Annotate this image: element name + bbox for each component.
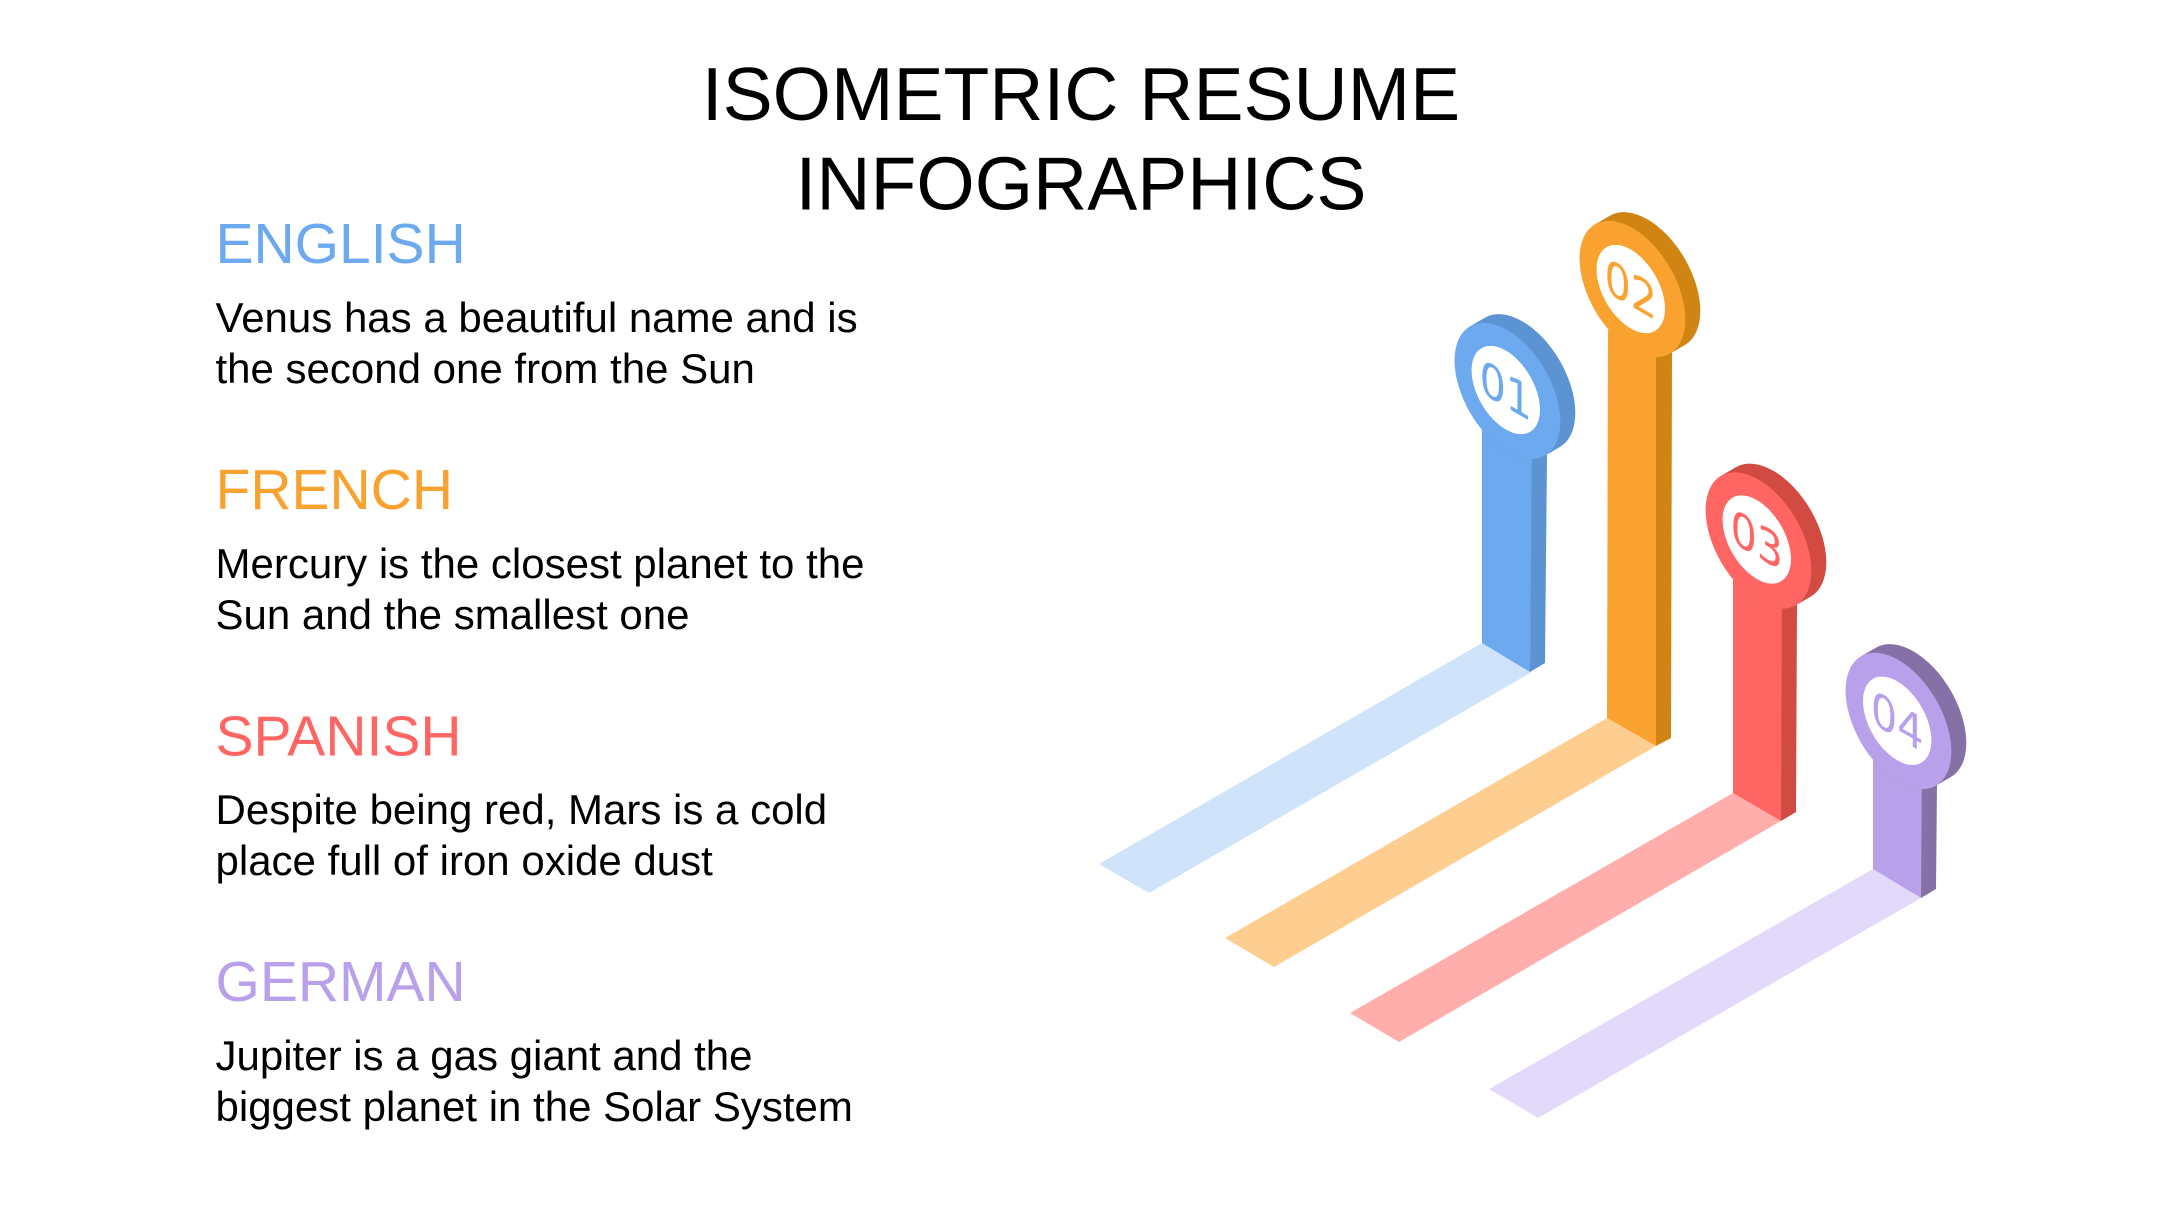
text block: spanish description: place full of iron oxide dust	[216, 837, 713, 884]
text block: english description	[216, 294, 858, 392]
text block: english description: Venus has a beautiful name and is	[216, 294, 858, 341]
title: ISOMETRIC RESUME	[702, 52, 1460, 136]
pin head 04	[1846, 630, 1951, 812]
heading: spanish: SPANISH	[216, 704, 462, 768]
pole 01	[1482, 430, 1547, 672]
text block: german description	[216, 1032, 853, 1130]
panel: french	[216, 458, 864, 638]
pin head 01: 01	[1480, 349, 1532, 434]
panel: english	[216, 212, 858, 392]
pole 04	[1873, 760, 1937, 898]
title	[702, 52, 1460, 226]
shadow 01	[1099, 643, 1532, 893]
heading: french: FRENCH	[216, 458, 453, 522]
pole 02	[1607, 330, 1672, 746]
pin head 01	[1455, 300, 1560, 482]
isometric pin 02	[1225, 198, 1685, 967]
panel: german	[216, 950, 853, 1130]
shadow 04	[1489, 869, 1921, 1118]
text block: spanish description: Despite being red, Mars is a cold	[216, 786, 827, 833]
pin head 04: 04	[1871, 680, 1923, 765]
text block: french description	[216, 540, 864, 638]
text block: english description: the second one from the Sun	[216, 345, 755, 392]
pin head 02: 02	[1605, 248, 1657, 333]
heading: english: ENGLISH	[216, 212, 466, 276]
text block: german description: biggest planet in the Solar System	[216, 1083, 853, 1130]
isometric pin 03	[1350, 449, 1811, 1042]
pin head 03	[1706, 449, 1811, 632]
shadow 02	[1225, 718, 1656, 967]
text block: german description: Jupiter is a gas giant and the	[216, 1032, 753, 1079]
text block: spanish description	[216, 786, 827, 884]
pin head 02	[1580, 198, 1685, 380]
heading: german: GERMAN	[216, 950, 466, 1014]
pole 03	[1733, 580, 1797, 821]
text block: french description: Sun and the smallest one	[216, 591, 689, 638]
title: INFOGRAPHICS	[796, 142, 1366, 226]
panel: spanish	[216, 704, 827, 884]
shadow 03	[1350, 793, 1781, 1042]
pin head 03: 03	[1731, 498, 1783, 584]
isometric pin 04	[1489, 630, 1951, 1118]
isometric pin 01	[1099, 300, 1560, 893]
text block: french description: Mercury is the closest planet to the	[216, 540, 864, 587]
